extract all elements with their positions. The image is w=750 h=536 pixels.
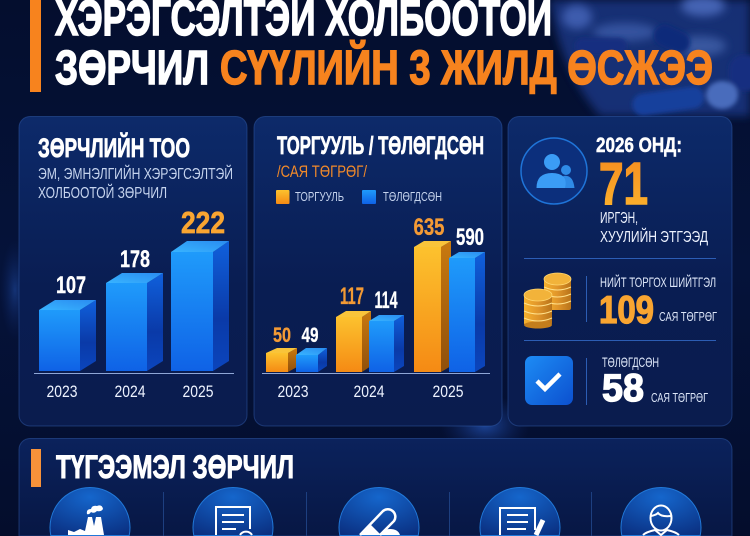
icon: person	[621, 488, 701, 536]
stat: total fines: 109	[599, 289, 654, 332]
bar chart: fines and paid	[262, 214, 490, 401]
stat: 2026 count: ХУУЛИЙН ЭТГЭЭД	[600, 227, 708, 246]
panel subtitle: ЭМ, ЭМНЭЛГИЙН ХЭРЭГСЭЛТЭЙ	[38, 164, 233, 183]
stat: 2026 count: 2026 ОНД:	[596, 134, 682, 157]
stat: 2026 count: ИРГЭН,	[600, 210, 638, 227]
panel: fines vs paid	[254, 116, 502, 426]
stat: 2026 count: 71	[599, 151, 648, 217]
bar chart: violations: 107	[56, 272, 86, 299]
bar chart: violations	[34, 205, 234, 401]
icon: document and pen	[480, 488, 560, 536]
bar chart: fines and paid: 2024	[354, 382, 384, 401]
icon: people	[521, 138, 587, 204]
icon: coins	[524, 273, 571, 328]
panel heading: ТОРГУУЛЬ / ТӨЛӨГДСӨН	[277, 132, 484, 160]
heading accent bar	[31, 449, 41, 487]
icon: factory	[50, 488, 130, 536]
bar chart: violations: 178	[120, 246, 150, 273]
stat: paid	[602, 354, 708, 410]
panel: common violations	[19, 438, 732, 536]
background: blurred capsules	[550, 0, 750, 117]
panel: violations count	[19, 116, 247, 426]
icon: capsule	[339, 488, 419, 536]
title: ЗӨРЧИЛ	[55, 42, 209, 95]
bar chart: fines and paid: 50	[273, 324, 291, 347]
bar chart: violations: 2023	[46, 382, 78, 401]
panel subtitle: ХОЛБООТОЙ ЗӨРЧИЛ	[38, 183, 167, 202]
stat: total fines: САЯ ТӨГРӨГ	[659, 309, 717, 324]
title accent bar	[30, 0, 41, 92]
bar chart: fines and paid: 635	[414, 214, 444, 241]
bar chart: fines and paid: 117	[340, 283, 364, 310]
panel heading: ТҮГЭЭМЭЛ ЗӨРЧИЛ	[56, 449, 294, 485]
bar chart: violations: 2024	[114, 382, 146, 401]
stat: paid: САЯ ТӨГРӨГ	[651, 390, 708, 405]
bar chart: fines and paid: 49	[302, 324, 318, 347]
stat: 2026 count	[596, 134, 708, 246]
bar chart: violations: 222	[181, 205, 225, 240]
panel subtitle	[38, 164, 233, 202]
panel heading: ЗӨРЧЛИЙН ТОО	[38, 132, 190, 163]
bar chart: violations: 2025	[182, 382, 214, 401]
legend: ТОРГУУЛЬ	[295, 189, 344, 204]
stat: paid: ТӨЛӨГДСӨН	[602, 354, 659, 370]
bar chart: fines and paid: 2023	[278, 382, 308, 401]
legend: ТӨЛӨГДСӨН	[383, 189, 442, 204]
panel unit: /САЯ ТӨГРӨГ/	[277, 162, 367, 181]
stat: paid: 58	[602, 367, 644, 410]
bar chart: fines and paid: 590	[456, 224, 484, 251]
legend	[276, 189, 442, 204]
panel: 2026 summary	[508, 116, 732, 426]
icon: checkbox	[525, 356, 573, 405]
icon: document search	[193, 488, 273, 536]
stat: total fines	[599, 273, 717, 332]
bar chart: fines and paid: 2025	[432, 382, 464, 401]
bar chart: fines and paid: 114	[374, 287, 398, 314]
title	[30, 0, 713, 95]
